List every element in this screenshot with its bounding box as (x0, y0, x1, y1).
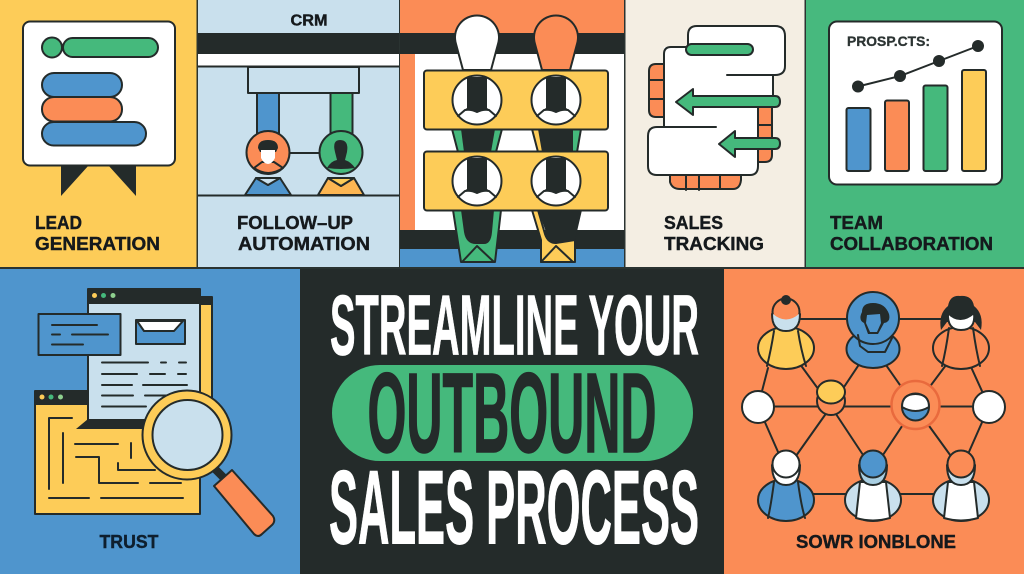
label: follow-up automation: FOLLOW–UP (237, 212, 353, 233)
label: CRM: CRM (290, 12, 328, 30)
icon: contact one (245, 131, 291, 195)
CRM bar (198, 33, 399, 66)
node: left (742, 391, 774, 423)
chart title: PROSP.CTS: (847, 33, 930, 49)
label: network: SOWR IONBLONE (796, 531, 956, 552)
label: trust: TRUST (100, 531, 159, 552)
label: lead generation: GENERATION (35, 233, 160, 254)
highlight pill (332, 365, 693, 461)
label: lead generation: LEAD (35, 212, 82, 233)
node: right (973, 391, 1005, 423)
panel: title: OUTBOUND (368, 350, 656, 476)
CRM hub box (248, 67, 359, 93)
label: team collaboration: TEAM (830, 212, 883, 233)
yellow slider top (424, 70, 608, 130)
icon: tracking documents (648, 26, 785, 190)
node: centre right (892, 381, 940, 429)
panel: trust (0, 269, 300, 574)
panel: pipeline (400, 0, 624, 267)
icon: magnifying glass (142, 390, 274, 536)
bar chart (846, 70, 986, 171)
line chart (852, 40, 984, 92)
person: top left (758, 295, 814, 369)
person: bottom left (758, 450, 814, 521)
network links (758, 319, 989, 494)
label: sales tracking: SALES (664, 212, 723, 233)
icon: list card (23, 22, 175, 196)
panel: network (724, 269, 1024, 574)
panel: team collaboration (806, 0, 1024, 267)
node: centre left (817, 380, 845, 415)
label: team collaboration: COLLABORATION (830, 233, 993, 254)
panel: follow-up automation (198, 0, 399, 267)
person: top right (933, 296, 989, 369)
icon: contact two (318, 131, 364, 195)
yellow slider bottom (424, 152, 608, 210)
icon: browser window yellow (35, 391, 200, 514)
chart card (829, 22, 1002, 184)
connector columns (257, 93, 352, 153)
icon: right peg (532, 15, 582, 262)
panel: sales tracking (626, 0, 804, 267)
icon: document window (76, 289, 212, 429)
person: bottom right (933, 450, 989, 521)
icon: left peg (452, 15, 502, 262)
label: sales tracking: TRACKING (664, 233, 764, 254)
label: follow-up automation: AUTOMATION (238, 233, 370, 254)
panel: lead generation (0, 0, 196, 267)
panel: title (300, 269, 724, 574)
icon: note card (38, 314, 120, 355)
person: bottom centre (845, 450, 901, 521)
person: top centre (846, 292, 900, 368)
